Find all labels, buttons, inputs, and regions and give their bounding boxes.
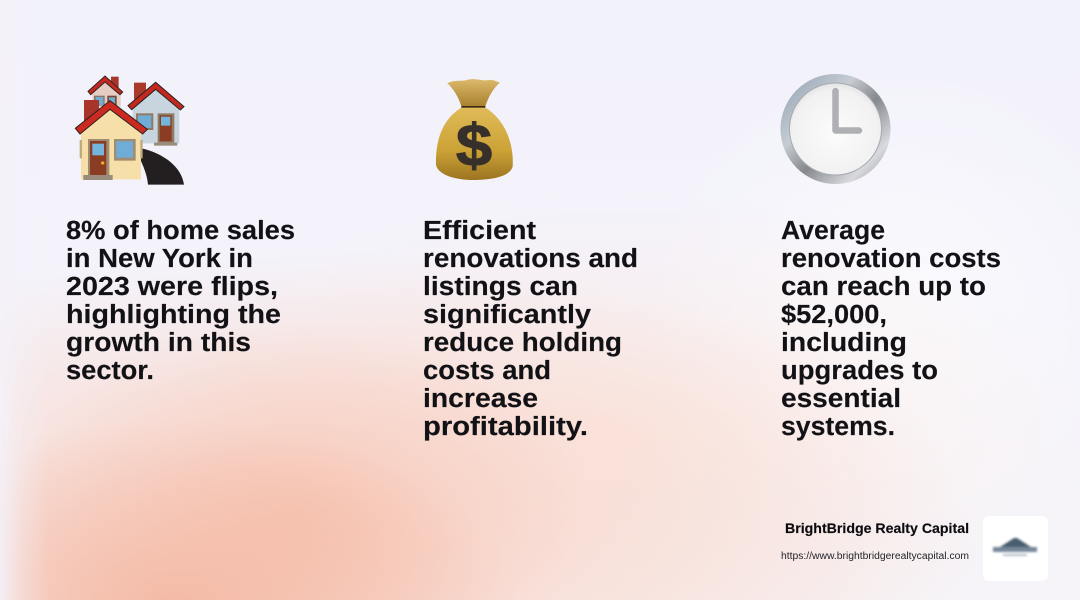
text block: renovations: increase xyxy=(423,385,538,413)
company name: BrightBridge Realty Capital xyxy=(785,521,969,536)
text block: home sales: 8% of home sales xyxy=(66,217,295,245)
logo card xyxy=(983,516,1048,581)
text block: costs: Average xyxy=(781,217,885,245)
text block: renovations: Efficient xyxy=(423,217,537,245)
text block: renovations: renovations and xyxy=(423,245,638,273)
text block: costs: including xyxy=(781,329,907,357)
text block: renovations: costs and xyxy=(423,357,551,385)
text block: costs: essential xyxy=(781,385,901,413)
text block: costs: systems. xyxy=(781,413,895,441)
icon: houses xyxy=(75,76,184,185)
text block: home sales: highlighting the xyxy=(66,301,281,329)
website url: https://www.brightbridgerealtycapital.com xyxy=(781,551,969,562)
text block: home sales: sector. xyxy=(66,357,154,385)
text block: renovations: listings can xyxy=(423,273,578,301)
text block: costs: renovation costs xyxy=(781,245,1001,273)
text block: home sales xyxy=(66,217,295,385)
text block: costs xyxy=(781,217,1001,441)
text block: renovations: significantly xyxy=(423,301,592,329)
text block: home sales: growth in this xyxy=(66,329,251,357)
icon: money bag xyxy=(436,79,513,180)
text block: home sales: 2023 were flips, xyxy=(66,273,278,301)
dollar sign: $ xyxy=(456,113,492,179)
text block: costs: can reach up to xyxy=(781,273,986,301)
text block: renovations xyxy=(423,217,638,441)
text block: costs: $52,000, xyxy=(781,301,887,329)
text block: renovations: profitability. xyxy=(423,413,588,441)
text block: home sales: in New York in xyxy=(66,245,253,273)
text block: renovations: reduce holding xyxy=(423,329,622,357)
text block: costs: upgrades to xyxy=(781,357,938,385)
icon: clock xyxy=(780,74,890,184)
